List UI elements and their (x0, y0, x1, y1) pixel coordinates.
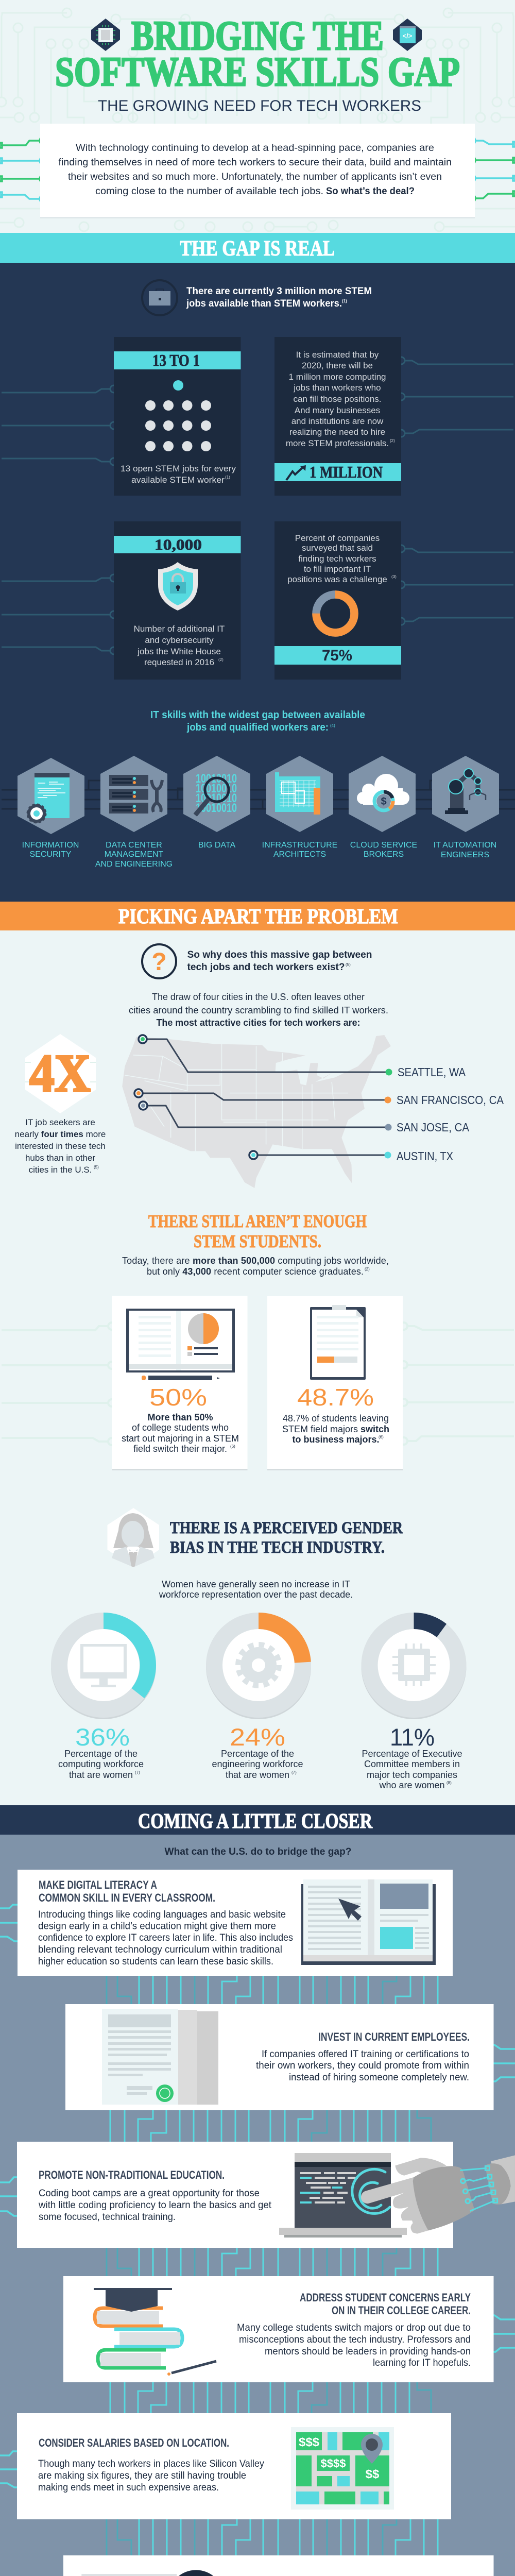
circuit lines between cards (107, 1975, 438, 2555)
panel: the gap is real (0, 263, 515, 902)
cities intro text: The most attractive cities for tech workers are: (157, 1018, 360, 1028)
banner: The gap is real (0, 233, 515, 263)
icon: city map with salaries (291, 2427, 394, 2510)
subheading: What can the U.S. do to bridge the gap? (165, 1846, 351, 1857)
callout: 4X: interested in these tech (15, 1141, 106, 1151)
question heading: ? (151, 948, 167, 976)
skill: data center management: AND ENGINEERING (95, 860, 173, 869)
icon: open book with pie chart (126, 1309, 235, 1380)
stat intro text: (1) (342, 299, 347, 303)
card: 50 percent: 50% (149, 1384, 207, 1411)
skills heading (150, 709, 365, 733)
card: address student concerns: misconceptions about the tech industry. Professors and (239, 2334, 471, 2345)
card: invest in current employees: instead of hiring someone completely new. (289, 2072, 469, 2083)
banner: picking apart the problem: PICKING APART THE PROBLEM (118, 904, 398, 928)
stat intro text: jobs available than STEM workers. (186, 298, 342, 309)
title (55, 13, 460, 95)
donut: 36 percent computing: Percentage of the (64, 1749, 138, 1759)
card: digital literacy: Introducing things like coding languages and basic website (38, 1909, 286, 1920)
skills heading: jobs and qualified workers are: (186, 722, 329, 733)
card: 13 to 1: (1) (225, 475, 230, 480)
route: San Francisco: SAN FRANCISCO, CA (397, 1093, 504, 1107)
panel: header (0, 8, 515, 231)
card: 50 percent (112, 1296, 247, 1470)
donut: 11 percent executive: 11% (390, 1723, 435, 1751)
question heading: tech jobs and tech workers exist? (187, 962, 345, 973)
intro text box: coming close to the number of available tech jobs. (95, 186, 323, 197)
donut: 11 percent executive: (8) (447, 1781, 452, 1785)
icon: certificate (102, 2009, 218, 2105)
STEM students text: Today, there are more than 500,000 computing jobs worldwide, (122, 1256, 389, 1266)
card: 1 million: It is estimated that by (296, 350, 379, 360)
icon: laptop (279, 2153, 407, 2238)
card: 1 million: jobs than workers who (293, 383, 381, 393)
card: non-traditional education: Coding boot camps are a great opportunity for those (39, 2188, 260, 2199)
donut: 11 percent executive: who are women (379, 1780, 445, 1790)
card: 75 percent: finding tech workers (298, 554, 376, 564)
heading: not enough STEM students (148, 1211, 367, 1251)
card: digital literacy: COMMON SKILL IN EVERY CLASSROOM. (39, 1891, 215, 1904)
card: salaries by location: CONSIDER SALARIES BASED ON LOCATION. (39, 2436, 229, 2449)
banner: The gap is real: THE GAP IS REAL (180, 237, 335, 261)
card: reach out to women and minorities (0, 2555, 493, 2576)
card: 10,000: and cybersecurity (145, 635, 214, 645)
route: San Jose (139, 1101, 470, 1134)
cities intro text: cities around the country scrambling to find skilled IT workers. (129, 1005, 388, 1015)
card: 75 percent: surveyed that said (302, 543, 373, 553)
heading: not enough STEM students: THERE STILL AREN’T ENOUGH (148, 1211, 367, 1231)
card: 13 to 1: 13 open STEM jobs for every (121, 464, 236, 473)
donut: 36 percent computing: (7) (135, 1770, 140, 1775)
card: address student concerns: Many college students switch majors or drop out due to (237, 2323, 471, 2333)
icon: clipboard (310, 1305, 366, 1380)
card: 48.7 percent: to business majors. (292, 1434, 380, 1445)
title: BRIDGING THE (131, 13, 384, 59)
question heading (142, 944, 372, 978)
card connectors (0, 1902, 515, 2576)
route: Austin: AUSTIN, TX (397, 1149, 453, 1163)
card: address student concerns: mentors should be leaders in providing hands-on (265, 2346, 471, 2357)
heading: gender bias: BIAS IN THE TECH INDUSTRY. (170, 1538, 385, 1557)
card: 10,000: jobs the White House (137, 647, 221, 656)
card: 50 percent: field switch their major. (133, 1444, 227, 1454)
card: 10,000 (114, 521, 241, 680)
card: address student concerns: ADDRESS STUDENT CONCERNS EARLY (300, 2291, 471, 2304)
intro text box: With technology continuing to develop at a head-spinning pace, companies are (76, 143, 434, 154)
card: 10,000: Number of additional IT (134, 624, 225, 634)
skill: information security: INFORMATION (22, 841, 79, 850)
card: 48.7 percent (267, 1296, 403, 1470)
card: 75 percent (274, 521, 401, 680)
banner: coming a little closer: COMING A LITTLE CLOSER (138, 1809, 372, 1833)
card: 1 million (274, 337, 401, 496)
card: 13 to 1: 13 TO 1 (152, 351, 200, 369)
card: 13 to 1 (114, 337, 241, 496)
callout: 4X: (5) (94, 1165, 99, 1170)
heading: gender bias: THERE IS A PERCEIVED GENDER (170, 1519, 403, 1537)
banner: picking apart the problem (0, 902, 515, 930)
route: San Jose: SAN JOSE, CA (397, 1121, 470, 1134)
skill: cloud service brokers: $ (381, 796, 387, 807)
donut: 24 percent engineering: (7) (291, 1770, 297, 1775)
card: digital literacy: confidence to explore IT careers later in life. This also includes (38, 1933, 293, 1943)
card: salaries by location (17, 2413, 451, 2519)
donut: 11 percent executive: Committee members in (364, 1759, 460, 1769)
subtitle: THE GROWING NEED FOR TECH WORKERS (98, 97, 421, 114)
card: 75 percent: 75% (322, 647, 352, 664)
question heading: So why does this massive gap between (187, 950, 372, 960)
callout: 4X: 4X (29, 1044, 91, 1103)
skill: data center management: MANAGEMENT (105, 850, 164, 859)
skill: big data: 10010010 (196, 791, 237, 805)
card: 48.7 percent: (6) (379, 1435, 384, 1439)
gender bias text: workforce representation over the past decade. (159, 1589, 353, 1600)
skill: information security (18, 758, 84, 859)
icon: code window hexagon (393, 19, 422, 51)
donut: 24 percent engineering: that are women (226, 1770, 289, 1780)
skill: IT automation engineers: IT AUTOMATION (434, 841, 496, 850)
card: 75 percent: to fill important IT (304, 564, 371, 574)
icon: city map with salaries: $$$$ (321, 2457, 346, 2470)
cities intro text: The draw of four cities in the U.S. often leaves other (152, 992, 365, 1002)
icon: book with cursor (301, 1879, 436, 1965)
card: 1 million: And many businesses (295, 405, 380, 415)
card: 1 million: and institutions are now (291, 416, 384, 426)
card: digital literacy: blending relevant technology curriculum within traditional (38, 1944, 282, 1955)
STEM students text: but only 43,000 recent computer science graduates. (147, 1266, 364, 1277)
skill connector lines (2, 781, 515, 809)
callout: 4X (15, 1034, 106, 1175)
card: invest in current employees: their own workers, they could promote from within (256, 2060, 469, 2071)
icon: robot hand, touch rings and magnifier (0, 2573, 221, 2576)
banner: coming a little closer (0, 1805, 515, 1835)
card: salaries by location: are making six figures, they are still having trouble (38, 2470, 246, 2481)
skill: infrastructure architects (262, 756, 337, 859)
question heading: (5) (346, 962, 351, 967)
card: 13 to 1: available STEM worker (131, 475, 225, 485)
card: invest in current employees: If companies offered IT training or certifications to (262, 2049, 469, 2060)
skill: big data: 10010010 (196, 782, 237, 795)
heading: not enough STEM students: STEM STUDENTS. (194, 1231, 321, 1251)
card: 50 percent: (6) (230, 1444, 235, 1449)
cities intro text (129, 992, 388, 1028)
card: digital literacy: higher education so students can learn these basic skills. (38, 1956, 273, 1967)
card: invest in current employees: INVEST IN CURRENT EMPLOYEES. (318, 2030, 470, 2043)
card: 50 percent: start out majoring in a STEM (122, 1433, 239, 1444)
skills heading: IT skills with the widest gap between available (150, 709, 365, 721)
skill: big data: 10010010 (196, 772, 237, 786)
card: 75 percent: Percent of companies (295, 533, 380, 543)
card: 10,000: requested in 2016 (144, 657, 214, 667)
card: invest in current employees (65, 2004, 493, 2110)
donut: 24 percent engineering: 24% (230, 1723, 285, 1751)
card: 10,000: (2) (218, 657, 224, 662)
stat intro text: There are currently 3 million more STEM (186, 286, 372, 297)
icon: briefcase (142, 280, 177, 315)
card: non-traditional education: with little coding proficiency to learn the basics and get (38, 2200, 272, 2211)
circuit background pattern (0, 8, 515, 231)
callout: 4X: cities in the U.S. (29, 1165, 92, 1175)
card: 48.7 percent: 48.7% of students leaving (283, 1413, 389, 1423)
skill: cloud service brokers: CLOUD SERVICE (350, 841, 417, 850)
card: 1 million: 1 million more computing (289, 372, 386, 382)
card: digital literacy (18, 1870, 453, 1976)
skill: IT automation engineers: ENGINEERS (441, 851, 489, 859)
icon: robot hand pointing left (361, 2155, 515, 2234)
intro connectors (0, 137, 515, 202)
donut: 11 percent executive: Percentage of Executive (362, 1749, 462, 1759)
intro text box: finding themselves in need of more tech workers to secure their data, build and maintain (59, 157, 452, 168)
skill: infrastructure architects: INFRASTRUCTURE (262, 841, 337, 850)
icon: chip hexagon (91, 19, 120, 51)
gender bias text: Women have generally seen no increase in IT (162, 1579, 350, 1589)
card: 75 percent: positions was a challenge (287, 574, 387, 584)
donut: 11 percent executive: major tech companies (367, 1770, 457, 1780)
skill: data center management: DATA CENTER (106, 841, 162, 850)
skill: data center management (95, 756, 173, 869)
icon: city map with salaries: $$ (366, 2467, 380, 2481)
card: salaries by location: Though many tech workers in places like Silicon Valley (38, 2459, 264, 2469)
callout: 4X: nearly four times more (15, 1129, 106, 1139)
callout: 4X: IT job seekers are (25, 1117, 95, 1127)
intro text box (40, 124, 475, 218)
STEM card connectors (2, 1323, 514, 1445)
panel: bridging solutions (0, 1835, 515, 2576)
card: 75 percent: (3) (391, 574, 397, 579)
map: United States with city pins (122, 1035, 504, 1188)
donut: 36 percent computing (51, 1613, 156, 1780)
card: 50 percent: of college students who (132, 1422, 229, 1433)
card: address student concerns (63, 2276, 493, 2382)
card: digital literacy: design early in a child’s education might give them more (38, 1921, 276, 1932)
icon: graduation books (94, 2288, 216, 2376)
card: 1 million: (2) (390, 438, 395, 443)
donut chart: 75% (316, 595, 354, 633)
card: 48.7 percent: STEM field majors switch (282, 1424, 389, 1434)
card: 1 million: can fill those positions. (293, 394, 382, 404)
card: address student concerns: ON IN THEIR COLLEGE CAREER. (332, 2304, 471, 2317)
card: non-traditional education: some focused, technical training. (39, 2212, 176, 2223)
icon: code window hexagon: </> (403, 32, 413, 40)
gender bias text (159, 1579, 353, 1600)
skill: cloud service brokers: BROKERS (364, 850, 404, 859)
donut: 24 percent engineering: engineering workforce (212, 1759, 303, 1769)
skill: infrastructure architects: ARCHITECTS (273, 850, 326, 859)
skills heading: (4) (330, 723, 335, 728)
heading: gender bias (170, 1519, 403, 1557)
STEM students text: (2) (365, 1267, 370, 1272)
card: address student concerns: learning for IT hopefuls. (373, 2358, 471, 2368)
card: 10,000: 10,000 (154, 536, 202, 553)
card: 1 million: 2020, there will be (302, 361, 373, 370)
stat intro text (186, 286, 372, 309)
skill: cloud service brokers (349, 756, 417, 859)
donut: 36 percent computing: 36% (75, 1723, 130, 1751)
route: Seattle: SEATTLE, WA (398, 1065, 466, 1079)
callout: 4X: hubs than in other (25, 1153, 95, 1163)
skill: big data: 10010010 (196, 801, 237, 815)
route: San Francisco (134, 1089, 504, 1107)
donut: 24 percent engineering: Percentage of the (221, 1749, 294, 1759)
card: non-traditional education: PROMOTE NON-TRADITIONAL EDUCATION. (39, 2168, 225, 2181)
donut: 36 percent computing: that are women (69, 1770, 133, 1780)
icon: city map with salaries: $$$ (299, 2435, 320, 2449)
skill: IT automation engineers (432, 756, 499, 859)
donut: 11 percent executive (362, 1613, 467, 1790)
donut: 24 percent engineering (206, 1613, 311, 1780)
card: digital literacy: MAKE DIGITAL LITERACY A (39, 1878, 157, 1891)
skill: big data: BIG DATA (198, 841, 235, 850)
card: 1 million: realizing the need to hire (289, 427, 385, 437)
card: salaries by location: making ends meet in such expensive areas. (38, 2482, 219, 2493)
skill: information security: SECURITY (30, 850, 72, 859)
donut: 36 percent computing: computing workforce (58, 1759, 144, 1769)
card: 48.7 percent: 48.7% (297, 1384, 374, 1411)
stat connectors (2, 357, 513, 654)
card: 1 million: more STEM professionals. (286, 438, 389, 448)
STEM students text (122, 1256, 389, 1277)
card: 50 percent: More than 50% (147, 1412, 213, 1422)
skill: big data (183, 756, 250, 850)
route: Seattle (139, 1035, 466, 1079)
card: 1 million: 1 MILLION (310, 463, 383, 481)
card: non-traditional education (17, 2142, 515, 2248)
route: Austin (249, 1149, 453, 1163)
intro text box: So what’s the deal? (326, 186, 415, 197)
intro text box: their websites and so much more. Unfortunately, the number of applicants isn’t even (68, 172, 442, 182)
icon: woman hexagon (107, 1508, 159, 1567)
